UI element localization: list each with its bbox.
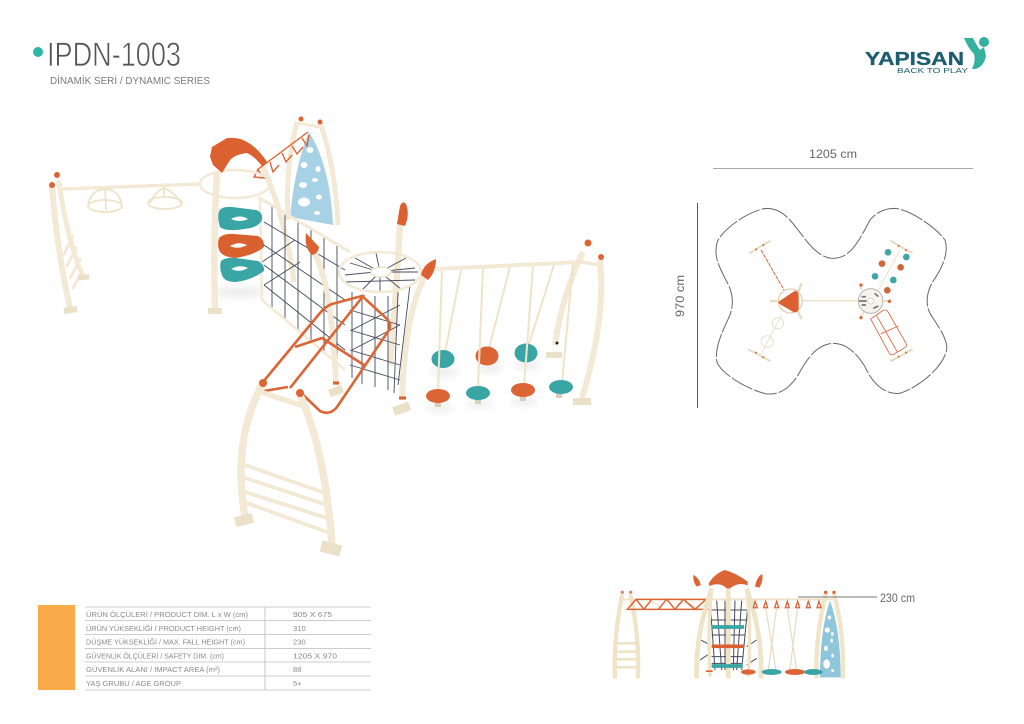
spec table: 1205 X 970 [293, 652, 337, 660]
plan view [716, 208, 947, 394]
net tower [306, 202, 436, 416]
elevation: swing ropes [766, 608, 798, 670]
back climbing panel [287, 116, 338, 225]
spec table: DÜŞME YÜKSEKLİĞİ / MAX. FALL HEIGHT (cm) [86, 638, 245, 646]
top ring [200, 170, 270, 198]
plan: equipment [748, 241, 913, 361]
spec table: GÜVENLİK ÖLÇÜLERİ / SAFETY DIM. (cm) [86, 652, 224, 660]
climbing pads [218, 207, 264, 282]
elevation: ring handles [643, 602, 697, 610]
height callout [798, 591, 915, 605]
height callout: 230 cm [880, 591, 915, 605]
orange ladder [254, 132, 309, 178]
elevation: left frame [615, 591, 638, 678]
spec table: 88 [293, 665, 301, 674]
safety zone outline [716, 208, 947, 394]
elevation: main bar [622, 596, 833, 602]
subtitle: series: DİNAMİK SERİ / DYNAMIC SERIES [50, 74, 210, 87]
central tower post [214, 173, 217, 310]
logo: Yapisan [865, 37, 989, 75]
spec table: 310 [293, 624, 306, 633]
swing ropes front [438, 263, 573, 393]
back arch post [262, 165, 294, 282]
spec colour block [38, 605, 75, 690]
elevation: swing triangles [753, 601, 821, 608]
elevation: orange roof and tips [693, 570, 763, 672]
ground shadows [214, 286, 542, 412]
left ladder frame [52, 182, 200, 314]
swing ropes [445, 265, 554, 353]
spec table: YAŞ GRUBU / AGE GROUP [86, 679, 181, 688]
swing frame [435, 252, 601, 405]
spec table: ÜRÜN YÜKSEKLİĞİ / PRODUCT HEIGHT (cm) [86, 624, 241, 633]
elevation: orange ladder [627, 599, 711, 609]
hanging ring handles [88, 188, 182, 212]
width dimension: 1205 cm [809, 147, 857, 161]
spec table: ÜRÜN ÖLÇÜLERİ / PRODUCT DIM. L x W (cm) [86, 610, 248, 619]
logo: Yapisan: BACK TO PLAY [897, 66, 968, 75]
elevation: discs [741, 669, 823, 675]
elevation: blue panel [816, 591, 843, 678]
spec table: GÜVENLİK ALANI / IMPACT AREA (m²) [86, 665, 220, 674]
rope discs back row [432, 344, 538, 368]
orange climbing frame [263, 295, 390, 413]
elevation: net tower posts [697, 587, 761, 678]
orange roof [210, 138, 267, 173]
spec table [85, 607, 371, 690]
rope discs front row [426, 380, 573, 407]
front elevation view [615, 570, 843, 678]
spec table: 905 X 675 [293, 610, 332, 619]
title: model code: IPDN-1003 [47, 36, 181, 74]
elevation: net [700, 601, 757, 670]
spec table: 5+ [293, 679, 302, 688]
front ladder arch [234, 385, 342, 556]
spec table: 230 [293, 638, 306, 646]
logo: Yapisan: YAPISAN [865, 49, 964, 69]
depth dimension: 970 cm [673, 275, 687, 317]
main 3D playground illustration [49, 116, 604, 556]
elevation: climbing pads [712, 627, 744, 666]
net panel [258, 197, 350, 370]
